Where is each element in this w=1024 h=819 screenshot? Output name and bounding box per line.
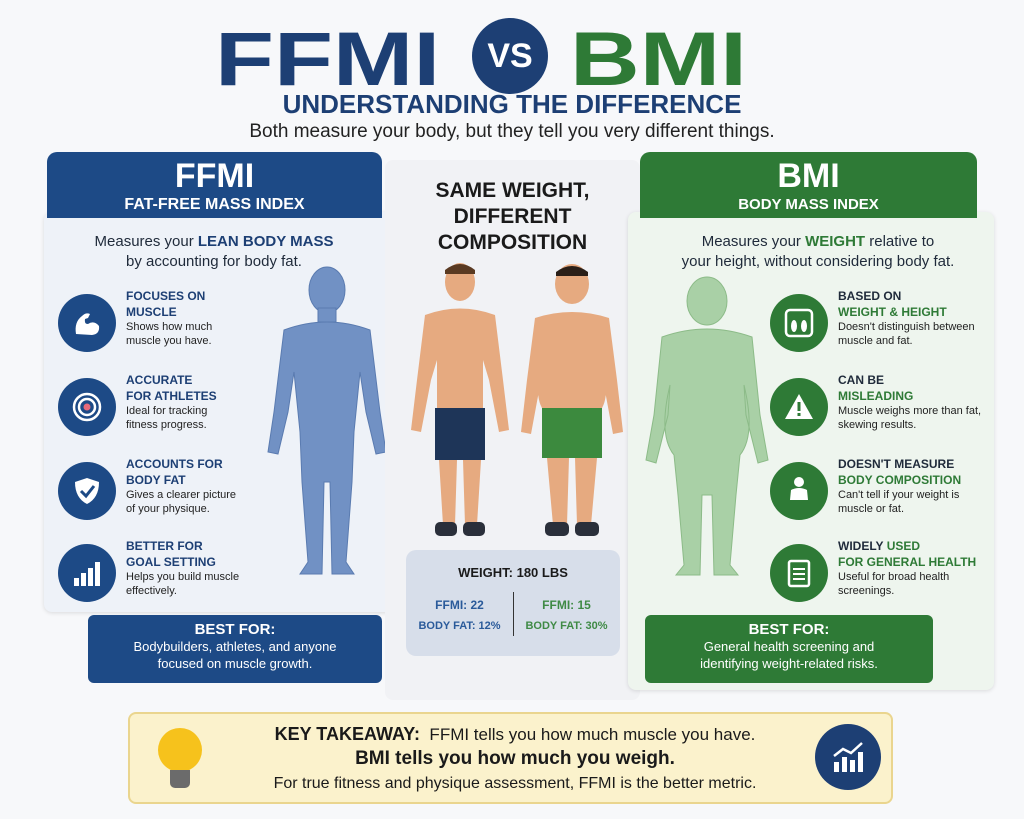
item: misleading: CAN BE [838,373,884,387]
item: widely used [770,539,976,602]
best for: FFMI: focused on muscle growth. [158,656,312,671]
item: misleading [770,373,981,436]
item: widely used: FOR GENERAL HEALTH [838,555,976,569]
item: goal setting: BETTER FOR [126,539,203,553]
center heading: SAME WEIGHT, [435,179,590,202]
best for: BMI [645,615,933,683]
item: body composition: BODY COMPOSITION [838,473,961,487]
stats box: BODY FAT: 30% [525,620,608,632]
center heading [435,179,590,254]
item: misleading: MISLEADING [838,389,913,403]
stats box: WEIGHT: 180 LBS [458,565,568,580]
vs badge [472,18,548,94]
takeaway text [274,724,756,792]
item: accounts for body fat: Gives a clearer picture [126,489,236,501]
item: weight & height: muscle and fat. [838,335,913,347]
takeaway text: For true fitness and physique assessment, FFMI is the better metric. [274,775,756,792]
item: body composition: muscle or fat. [838,503,904,515]
stats box: FFMI: 22 [435,598,484,612]
item: accounts for body fat [58,457,236,520]
tagline: Both measure your body, but they tell you very different things. [249,121,775,142]
item: weight & height: BASED ON [838,289,901,303]
figure: heavier man [521,264,623,536]
item: accurate for athletes: Ideal for tracking [126,405,207,417]
item: accounts for body fat: of your physique. [126,503,210,515]
item: body composition: DOESN'T MEASURE [838,457,954,471]
item: misleading: Muscle weighs more than fat, [838,405,981,417]
FFMI header: FAT-FREE MASS INDEX [124,196,305,213]
BMI header [640,152,977,218]
takeaway text: BMI tells you how much you weigh. [355,748,675,769]
item: accounts for body fat: ACCOUNTS FOR [126,457,223,471]
item: widely used: WIDELY USED [838,539,920,553]
title: BMI: BMI [570,17,747,102]
item: focuses on muscle: muscle you have. [126,335,212,347]
item: body composition [770,457,961,520]
callout: key takeaway [128,712,893,804]
item: accounts for body fat: BODY FAT [126,473,186,487]
item: goal setting: effectively. [126,585,177,597]
item: widely used: screenings. [838,585,894,597]
FFMI header [47,152,382,218]
vs badge: VS [487,37,533,75]
item: body composition: Can't tell if your weight is [838,489,959,501]
BMI header: BMI [777,157,840,195]
intro text [682,233,954,270]
icon: growth chart [815,724,881,790]
stats box: BODY FAT: 12% [418,620,501,632]
intro text: Measures your LEAN BODY MASS [95,233,333,250]
BMI header: BODY MASS INDEX [738,196,879,213]
item: weight & height: WEIGHT & HEIGHT [838,305,947,319]
item: accurate for athletes: fitness progress. [126,419,207,431]
intro text: your height, without considering body fat. [682,253,954,270]
item: weight & height [770,289,975,352]
item: focuses on muscle: FOCUSES ON [126,289,205,303]
best for: FFMI: BEST FOR: [195,621,275,638]
stats box [406,550,620,656]
figure: muscular silhouette [267,266,385,574]
figure: fit man [411,263,509,536]
intro text: Measures your WEIGHT relative to [702,233,934,250]
panel body [44,212,396,612]
panel: FFMI [43,152,385,614]
panel: center comparison [385,160,640,700]
item: accurate for athletes: FOR ATHLETES [126,389,217,403]
icon: lightbulb [158,728,202,772]
item: focuses on muscle: Shows how much [126,321,212,333]
item: focuses on muscle: MUSCLE [126,305,177,319]
intro text [95,233,333,270]
item: focuses on muscle [58,289,212,352]
FFMI header: FFMI [175,157,254,195]
takeaway text: KEY TAKEAWAY: FFMI tells you how much muscle you have. [275,724,755,744]
panel body [628,212,994,690]
item: misleading: skewing results. [838,419,916,431]
best for: BMI: General health screening and [704,639,874,654]
best for: BMI: identifying weight-related risks. [700,656,878,671]
item: widely used: Useful for broad health [838,571,949,583]
subtitle: UNDERSTANDING THE DIFFERENCE [283,89,741,119]
item: goal setting [58,539,239,602]
intro text: by accounting for body fat. [126,253,302,270]
best for: BMI: BEST FOR: [749,621,829,638]
center heading: COMPOSITION [438,231,587,254]
title [215,17,747,102]
panel: BMI [627,152,995,692]
best for: FFMI: Bodybuilders, athletes, and anyone [133,639,337,654]
item: goal setting: GOAL SETTING [126,555,216,569]
stats box: FFMI: 15 [542,598,591,612]
center heading: DIFFERENT [454,205,571,228]
figure: bmi silhouette [646,276,768,576]
item: goal setting: Helps you build muscle [126,571,239,583]
item: weight & height: Doesn't distinguish between [838,321,975,333]
best for: FFMI [88,615,382,683]
title: FFMI: FFMI [215,17,440,102]
item: accurate for athletes [58,373,217,436]
item: accurate for athletes: ACCURATE [126,373,192,387]
